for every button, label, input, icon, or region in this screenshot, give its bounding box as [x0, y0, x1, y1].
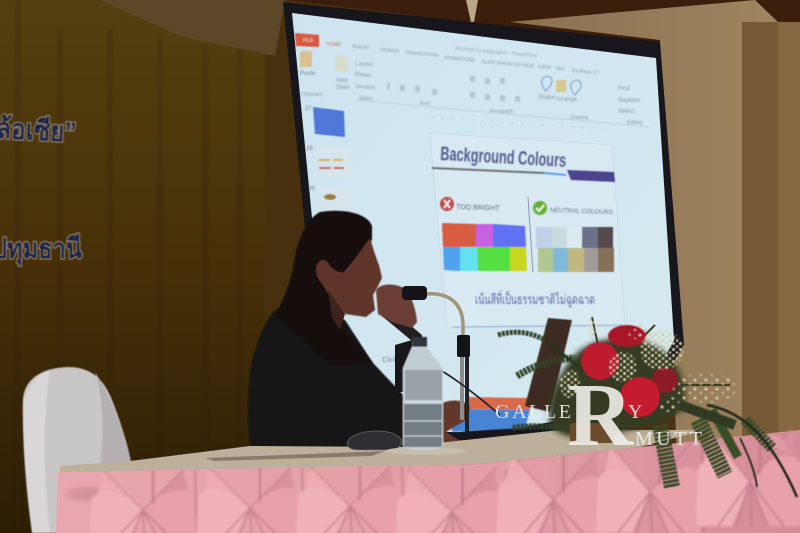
- laptop: [462, 318, 572, 443]
- hanging cord: [466, 0, 478, 22]
- chair: [23, 367, 131, 533]
- PowerPoint ribbon: Drawing: [570, 115, 589, 121]
- PowerPoint ribbon: Select: [618, 109, 635, 115]
- face: [316, 238, 382, 317]
- PowerPoint ribbon: EndNote X7: [572, 68, 599, 76]
- screen frame: [283, 2, 684, 440]
- jacket: [248, 300, 408, 447]
- PowerPoint ribbon: DESIGN: [380, 47, 400, 55]
- curtain: left gold drape: [0, 0, 305, 533]
- smudge on left cloth: [66, 487, 110, 501]
- PowerPoint ribbon: Shape: [538, 95, 556, 101]
- ferns: [498, 332, 797, 497]
- PowerPoint ribbon: VIEW: [538, 64, 551, 71]
- mic rod: [460, 357, 464, 420]
- laptop lid: [525, 318, 572, 412]
- icon: green check: [533, 201, 547, 215]
- heading rule: [432, 167, 615, 182]
- PowerPoint ribbon: Slide: [336, 85, 350, 91]
- gooseneck: [425, 294, 463, 335]
- dark foliage: [549, 338, 685, 439]
- PowerPoint ribbon: Layout: [355, 61, 374, 68]
- document on table: [205, 451, 385, 461]
- PowerPoint ribbon: REVIEW: [514, 62, 534, 70]
- watermark: gallery rmutt: GALLE: [495, 401, 571, 423]
- carnation: right: [652, 367, 678, 393]
- PowerPoint ribbon: HOME: [326, 41, 342, 48]
- microphone: [402, 286, 500, 435]
- slide thumbnails: 39: [308, 186, 315, 192]
- handheld microphone: [387, 313, 417, 338]
- PowerPoint ribbon: [295, 33, 650, 130]
- PowerPoint ribbon: Replace: [618, 98, 641, 104]
- PowerPoint ribbon: FILE: [303, 38, 314, 44]
- flower arrangement: [498, 317, 797, 497]
- PowerPoint ribbon: Clipboard: [301, 92, 323, 98]
- screen surface: [292, 13, 674, 432]
- mouse: [347, 431, 401, 450]
- carnation: top: [608, 325, 646, 347]
- carnation: left: [581, 342, 619, 380]
- pink bow at right: [764, 435, 787, 452]
- PowerPoint ribbon: Arrange: [556, 97, 578, 103]
- slide heading: Background Colours: [440, 143, 567, 172]
- slide caption: เน้นสีที่เป็นธรรมชาติไม่ฉูดฉาด: [475, 290, 595, 308]
- water shade: [404, 404, 442, 447]
- label: neutral colours: NEUTRAL COLOURS: [550, 207, 613, 216]
- bottle label: [405, 370, 442, 400]
- swatches: too bright: [442, 223, 527, 271]
- baby's breath: [560, 317, 737, 413]
- cable: [440, 370, 500, 415]
- watermark: gallery rmutt: [495, 366, 702, 465]
- presenter: [248, 211, 470, 447]
- icon: red cross: [440, 197, 454, 211]
- mic stand collar: [457, 335, 470, 357]
- divider: [528, 197, 533, 272]
- mic head: [402, 286, 427, 300]
- PowerPoint ribbon: Reset: [355, 72, 371, 79]
- tablecloth: pink drape: [56, 427, 800, 533]
- bottle cap: [412, 337, 427, 347]
- PowerPoint ribbon: Find: [618, 86, 630, 92]
- PowerPoint ribbon: ANIMATIONS: [444, 55, 476, 64]
- watermark: gallery rmutt: R: [567, 366, 634, 465]
- sprig stem: [592, 317, 730, 385]
- slide thumbnails: [305, 106, 353, 215]
- sleeve: [395, 340, 412, 392]
- water bottle: [403, 337, 443, 450]
- swatches: neutral colours: [536, 227, 614, 272]
- slide canvas: [430, 133, 625, 328]
- label: too bright: TOO BRIGHT: [456, 204, 500, 213]
- PowerPoint ribbon: TRANSITIONS: [405, 50, 439, 59]
- hair: [276, 211, 373, 365]
- PowerPoint ribbon: MIX: [556, 66, 566, 73]
- taskbar: Click: [382, 357, 398, 364]
- taskbar: [382, 325, 622, 432]
- carnation: bottom: [620, 377, 660, 417]
- rosettes: [89, 427, 800, 533]
- slide thumbnails: 38: [306, 146, 313, 152]
- PowerPoint ribbon: Section: [355, 84, 375, 91]
- hand at laptop: [432, 401, 470, 447]
- projection screen: [283, 0, 684, 440]
- PowerPoint ribbon: Font: [420, 101, 431, 107]
- PowerPoint ribbon: Slides: [359, 96, 373, 102]
- PowerPoint ribbon: SLIDE SHOW: [481, 59, 513, 68]
- watermark: gallery rmutt: Y: [628, 401, 642, 423]
- slide thumbnails: 37: [305, 106, 312, 112]
- PowerPoint ribbon: Paste: [300, 71, 316, 77]
- PowerPoint ribbon: Editing: [627, 120, 643, 126]
- hand at microphone: [376, 284, 417, 328]
- wooden base: [570, 423, 614, 443]
- slide page: [430, 133, 625, 328]
- PowerPoint ribbon: New: [336, 78, 349, 84]
- laptop keyboard: [462, 430, 522, 443]
- neck: [328, 290, 345, 330]
- PowerPoint ribbon: INSERT: [352, 44, 371, 52]
- table edge: [60, 430, 705, 472]
- PowerPoint ribbon: Paragraph: [490, 109, 514, 115]
- watermark: gallery rmutt: MUTT: [635, 428, 702, 450]
- plate beneath bottle: [385, 447, 465, 455]
- bottle body: [403, 347, 443, 450]
- PowerPoint ribbon: 2015026-11-infographic - PowerPoint: [455, 46, 538, 59]
